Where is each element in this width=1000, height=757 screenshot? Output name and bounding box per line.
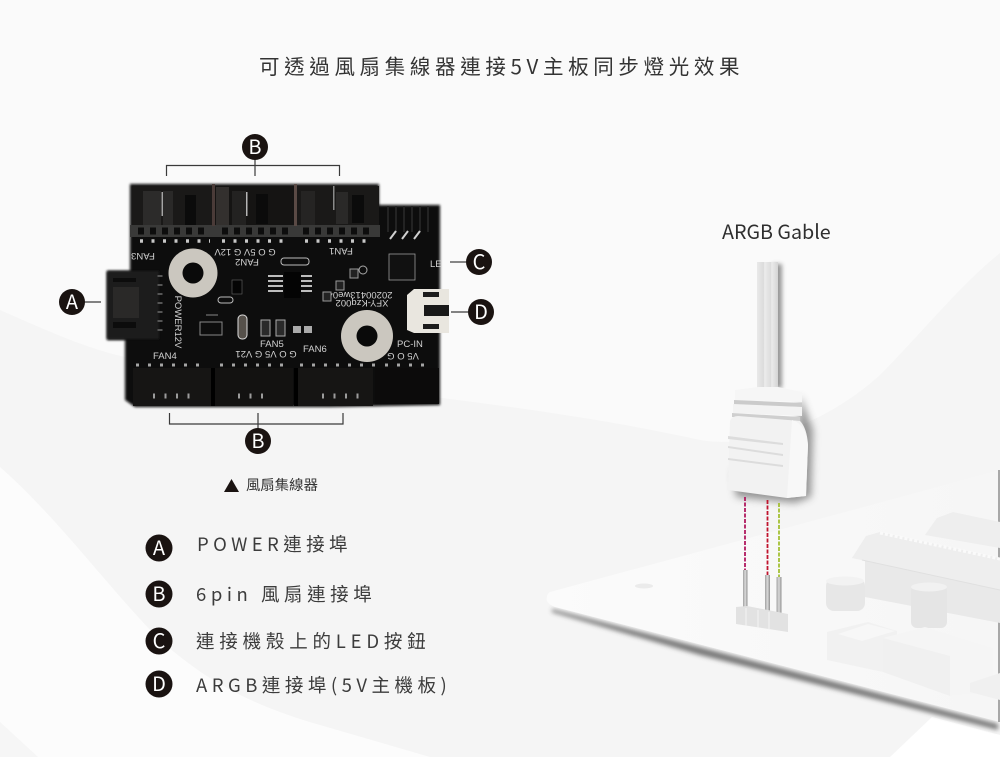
legend item D: ARGB連接埠(5V主機板) bbox=[196, 672, 451, 698]
marker A bbox=[59, 286, 101, 315]
board labels: FAN4 bbox=[153, 351, 177, 362]
motherboard plate bbox=[547, 470, 1000, 730]
legend item D: D bbox=[152, 668, 166, 697]
board labels: FAN2 bbox=[235, 256, 259, 267]
legend item B: 6pin 風扇連接埠 bbox=[196, 581, 376, 607]
marker A: A bbox=[66, 286, 79, 315]
board labels: G O 5V G 12V bbox=[214, 246, 276, 257]
marker D: D bbox=[474, 296, 488, 325]
board body bbox=[107, 184, 440, 407]
board labels: V5 O G bbox=[387, 350, 419, 361]
board labels: G O V5 G V21 bbox=[235, 348, 297, 359]
legend item A: A bbox=[153, 532, 166, 561]
board labels: FAN5 bbox=[260, 339, 284, 350]
board labels: LE bbox=[430, 259, 442, 270]
dashed guide magenta bbox=[744, 497, 746, 570]
board labels: PC-IN bbox=[397, 339, 423, 350]
marker D bbox=[451, 296, 494, 325]
ARGB cable label: ARGB Gable bbox=[722, 216, 831, 245]
plate surface bbox=[547, 470, 1000, 722]
legend item A bbox=[146, 531, 352, 562]
fan hub circuit board bbox=[107, 184, 449, 407]
board labels: XFY-Kzq002 bbox=[336, 297, 388, 308]
plug bbox=[728, 387, 813, 503]
mounting washer bottom bbox=[341, 310, 393, 362]
marker B top with bracket: B bbox=[248, 131, 262, 160]
top fan connectors bbox=[130, 184, 380, 241]
title: 可透過風扇集線器連接5V主板同步燈光效果 bbox=[259, 50, 744, 80]
right top header bbox=[388, 206, 428, 239]
legend item B: B bbox=[152, 578, 166, 607]
bottom fan connectors bbox=[133, 365, 439, 406]
legend bbox=[146, 531, 451, 698]
marker C bbox=[450, 246, 492, 275]
caption: 風扇集線器 bbox=[246, 474, 318, 495]
dashed guide red bbox=[766, 500, 768, 576]
board labels: POWER12V bbox=[172, 296, 183, 349]
chips bbox=[200, 254, 415, 339]
legend item C: C bbox=[153, 625, 166, 654]
cable bbox=[757, 262, 782, 390]
board labels bbox=[131, 245, 442, 362]
marker B bottom with bracket bbox=[170, 413, 343, 454]
header pins bbox=[736, 570, 788, 632]
board labels: FAN6 bbox=[303, 344, 327, 355]
marker B top with bracket bbox=[166, 131, 340, 176]
faded components bbox=[826, 512, 1000, 700]
plate shadow bbox=[552, 609, 998, 730]
board labels: FAN1 bbox=[329, 245, 353, 256]
board labels: FAN3 bbox=[131, 250, 155, 261]
ARGB cable and plug bbox=[728, 262, 813, 632]
mounting washer top bbox=[168, 248, 218, 298]
legend item B bbox=[146, 578, 376, 608]
dashed guide green bbox=[778, 503, 780, 578]
board labels: 20200413we04 bbox=[328, 289, 392, 300]
power connector bbox=[107, 271, 160, 339]
legend item A: POWER連接埠 bbox=[197, 531, 352, 557]
legend item C: 連接機殼上的LED按鈕 bbox=[196, 628, 430, 654]
marker B bottom with bracket: B bbox=[251, 425, 265, 454]
marker C: C bbox=[473, 246, 486, 275]
white ARGB connector bbox=[407, 289, 449, 333]
